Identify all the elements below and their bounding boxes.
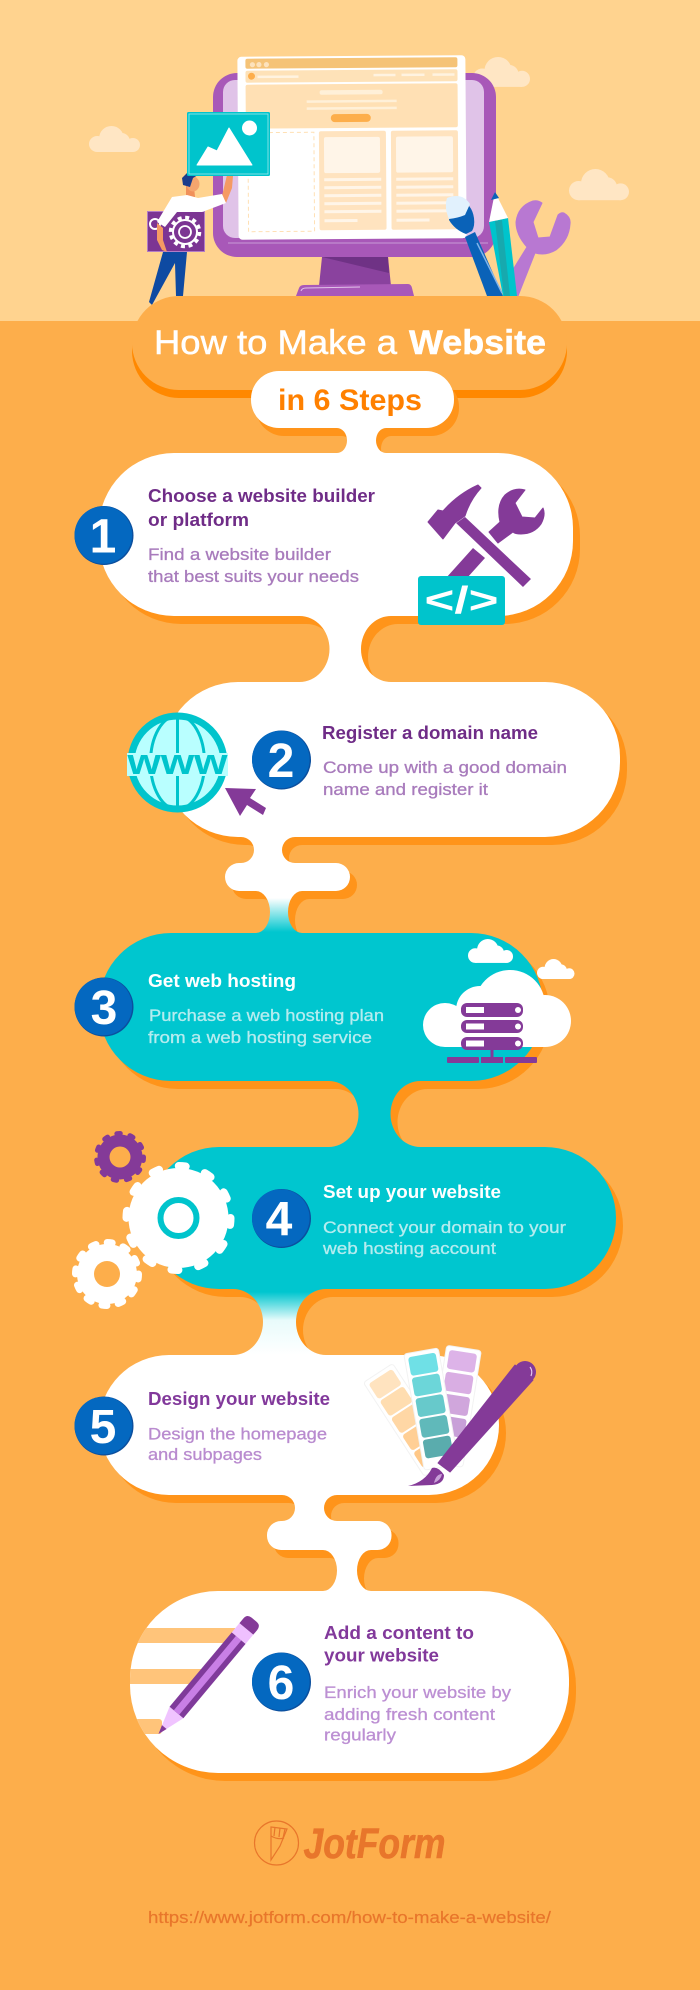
- logo mark: [254, 1821, 298, 1865]
- subtitle text: in 6 Steps: [278, 384, 422, 417]
- step 3 number badge: 3: [91, 982, 117, 1035]
- icon: www globe: www: [126, 741, 229, 782]
- step 2 number badge: 2: [268, 735, 294, 788]
- icon: hammer and wrench: [428, 485, 544, 588]
- purple paint brush: [408, 1361, 536, 1486]
- teal swatch strip: [404, 1348, 459, 1470]
- step 2 heading: Register a domain name: [322, 723, 538, 743]
- step 4 description: web hosting account: [322, 1239, 496, 1258]
- step 6 description: regularly: [324, 1726, 397, 1744]
- panel: step 6: [130, 1591, 569, 1773]
- step 4 number badge: 4: [266, 1194, 293, 1246]
- step 6 description: adding fresh content: [324, 1705, 495, 1724]
- step 5 description: and subpages: [148, 1445, 262, 1464]
- source url: https://www.jotform.com/how-to-make-a-website/: [148, 1908, 551, 1927]
- panel: step 4: [76, 1134, 616, 1306]
- connector: subtitle to step 1: [337, 428, 386, 453]
- step 1 heading: Choose a website builder: [148, 486, 375, 506]
- step 3 number badge: [74, 978, 134, 1036]
- icon: wrench tool: [514, 201, 570, 296]
- step 5 heading: Design your website: [148, 1389, 330, 1409]
- step 1 description: that best suits your needs: [148, 567, 359, 586]
- icon: www globe: [126, 715, 229, 810]
- step 1 number badge: 1: [90, 510, 116, 564]
- large white gear: [126, 1166, 230, 1270]
- connector: step 5 to tab: [282, 1495, 337, 1521]
- sky background: [0, 0, 700, 321]
- logo wordmark: JotForm: [304, 1820, 446, 1868]
- step 2 number badge: [252, 730, 311, 790]
- step 6 number badge: [252, 1652, 311, 1712]
- step 5 number badge: 5: [90, 1401, 116, 1454]
- settings panel with gear: [148, 212, 204, 252]
- orange swatch strip: [363, 1363, 454, 1476]
- step 5 description: Design the homepage: [148, 1424, 327, 1444]
- panel: step 1: [74, 453, 573, 625]
- connector: step 4 to step 5: [233, 1289, 326, 1355]
- title text: How to Make a: [154, 324, 397, 362]
- step 4 number badge: [252, 1189, 311, 1248]
- illustration: man holding panels: [148, 170, 233, 305]
- step 1 number badge: [74, 506, 134, 565]
- panel: step 2: [126, 682, 620, 837]
- illustration: desktop monitor: [213, 73, 496, 296]
- icon: teal pencil: [489, 192, 517, 296]
- icon: colour swatch fan and brush: [363, 1345, 536, 1486]
- step 3 heading: Get web hosting: [148, 971, 296, 991]
- step 2 description: name and register it: [323, 780, 488, 799]
- icon: cloud server: [423, 939, 574, 1063]
- step 3 description: from a web hosting service: [148, 1028, 372, 1047]
- connector: tab to step 6: [323, 1550, 371, 1591]
- icon: blue paint brush: [446, 196, 503, 296]
- step 1 heading: or platform: [148, 510, 249, 530]
- step 6 description: Enrich your website by: [324, 1683, 512, 1702]
- panel: step 5: [74, 1345, 536, 1495]
- icon: purple pencil: [152, 1614, 261, 1740]
- icon: code tag box: </>: [424, 580, 498, 622]
- image card with mountain icon: [187, 112, 270, 176]
- step 5 number badge: [74, 1396, 134, 1456]
- title text: Website: [409, 324, 546, 362]
- step 4 description: Connect your domain to your: [323, 1218, 566, 1237]
- writing stripes: [130, 1628, 235, 1734]
- connector: step 3 to step 4: [328, 1081, 420, 1147]
- connector: step 1 to step 2: [300, 616, 391, 682]
- clouds in sky: [89, 57, 629, 200]
- purple gear: [96, 1134, 144, 1180]
- icon: code tag box: [418, 576, 505, 625]
- connector tab: [267, 1521, 392, 1550]
- connector tab: [225, 863, 350, 891]
- icon: cursor arrow: [225, 788, 266, 816]
- step 2 description: Come up with a good domain: [323, 758, 567, 777]
- step 6 number badge: 6: [268, 1657, 294, 1710]
- connector: tab to step 3: [256, 891, 302, 933]
- purple swatch strip: [428, 1345, 481, 1467]
- icon: gears: [76, 1134, 230, 1306]
- connector: step 2 to tab: [241, 837, 295, 863]
- step 6 heading: Add a content to: [324, 1623, 474, 1643]
- title pill: [132, 296, 567, 390]
- small white gear: [76, 1242, 138, 1306]
- title pill shadow: [132, 304, 567, 398]
- step 4 heading: Set up your website: [323, 1182, 501, 1202]
- step 3 description: Purchase a web hosting plan: [149, 1006, 384, 1025]
- logo: JotForm: [254, 1820, 446, 1868]
- panel: step 3: [74, 933, 574, 1081]
- step 1 description: Find a website builder: [148, 545, 331, 564]
- step 6 heading: your website: [324, 1646, 439, 1666]
- subtitle pill: [251, 371, 454, 428]
- illustration: website window mockup: [237, 55, 467, 240]
- man legs: [149, 252, 187, 305]
- card drop shadows: [106, 379, 627, 1781]
